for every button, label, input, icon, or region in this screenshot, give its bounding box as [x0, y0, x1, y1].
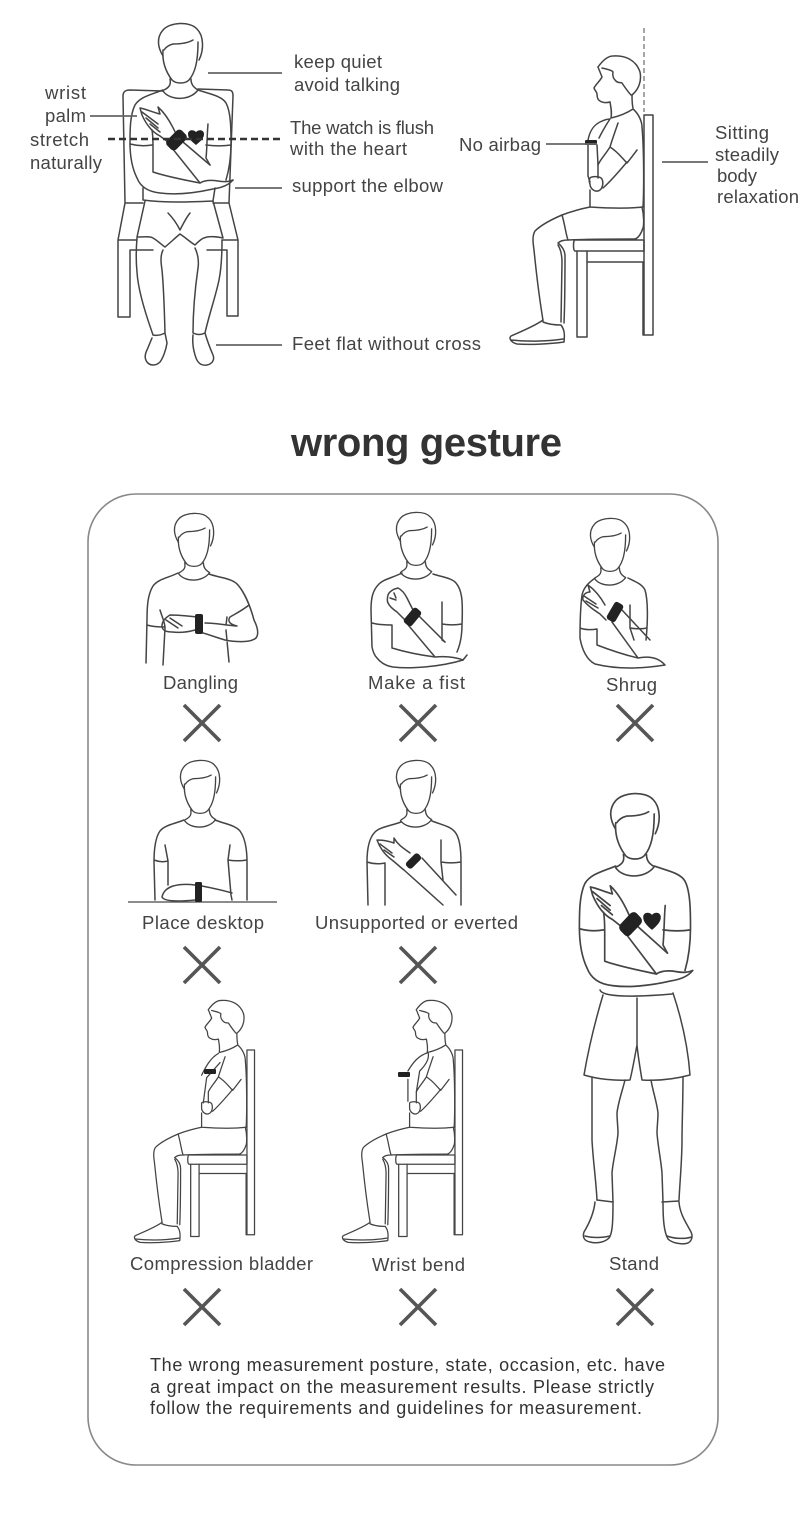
head: [158, 23, 203, 98]
label: stretch naturally: stretch: [30, 129, 89, 150]
leader line: keep quiet: [208, 72, 282, 74]
cross mark: [184, 1289, 220, 1325]
text block: warning note: a great impact on the measurement results. Please strictly: [150, 1377, 654, 1397]
text block: warning note: follow the requirements and guidelines for measurement.: [150, 1398, 642, 1418]
label: place desktop: Place desktop: [142, 912, 264, 933]
figure: unsupported or everted: [367, 760, 461, 905]
label: keep quiet, avoid talking: keep quiet: [294, 51, 382, 72]
seated posture front view: [118, 23, 238, 365]
figure: shrug: [580, 518, 665, 668]
arm and watch: [585, 119, 637, 191]
cross mark: [400, 947, 436, 983]
seated posture side view: [510, 28, 653, 344]
label: sitting steadily body relaxation: Sitting: [715, 122, 769, 143]
label: sitting steadily body relaxation: steadily: [715, 144, 780, 165]
leader line: palm: [90, 115, 137, 117]
vertical reference dashed line: [643, 28, 645, 112]
label: dangling: Dangling: [163, 672, 238, 693]
label: compression bladder: Compression bladder: [130, 1253, 313, 1274]
label: sitting steadily body relaxation: body: [717, 165, 758, 186]
shorts: [584, 990, 690, 1080]
label: make a fist: Make a fist: [368, 672, 465, 693]
label: no airbag: No airbag: [459, 134, 541, 155]
shoes: [583, 1200, 692, 1244]
label: wrist palm: [44, 82, 86, 126]
figure: place desktop: [128, 760, 277, 902]
label: the watch is flush with the heart: with the heart: [289, 138, 407, 159]
cross mark: [400, 705, 436, 741]
cross mark: [617, 1289, 653, 1325]
label: the watch is flush with the heart: [289, 117, 434, 159]
heart level dashed line: [108, 138, 282, 140]
shorts: [137, 188, 223, 247]
label: wrist palm: palm: [45, 105, 86, 126]
chair front view: [118, 89, 238, 317]
label: shrug: Shrug: [606, 674, 657, 695]
arms and torso with watch and heart: [130, 90, 233, 194]
label: stand: Stand: [609, 1253, 659, 1274]
label: unsupported or everted: Unsupported or everted: [315, 912, 518, 933]
label: wrist bend: Wrist bend: [372, 1254, 465, 1275]
leader line: sitting: [662, 161, 708, 163]
text block: warning note: [150, 1355, 665, 1418]
leader line: feet: [216, 344, 282, 346]
figure: compression bladder: [134, 1000, 255, 1243]
label: feet flat: Feet flat without cross: [292, 333, 481, 354]
cross mark: [184, 947, 220, 983]
body side view: [510, 56, 644, 344]
label: keep quiet, avoid talking: avoid talking: [294, 74, 400, 95]
chair side view: [574, 115, 653, 337]
legs and shoes: [136, 238, 222, 365]
figure: make a fist: [371, 512, 467, 668]
figure: stand: [579, 794, 693, 1244]
label: the watch is flush with the heart: The watch is flush: [290, 117, 434, 138]
label: sitting steadily body relaxation: relaxation: [717, 186, 799, 207]
leader line: support the elbow: [235, 187, 282, 189]
label: support the elbow: support the elbow: [292, 175, 444, 196]
figure: wrist bend: [342, 1000, 463, 1243]
label: sitting steadily body relaxation: [715, 122, 799, 207]
cross mark: [400, 1289, 436, 1325]
cross mark: [617, 705, 653, 741]
label: stretch naturally: naturally: [30, 152, 103, 173]
legs: [592, 1077, 683, 1202]
label: keep quiet, avoid talking: [294, 51, 400, 95]
text block: warning note: The wrong measurement posture, state, occasion, etc. have: [150, 1355, 665, 1375]
label: stretch naturally: [30, 129, 103, 173]
panel: wrong gestures: [88, 494, 718, 1465]
figure: dangling: [146, 513, 258, 665]
cross mark: [184, 705, 220, 741]
label: wrist palm: wrist: [44, 82, 86, 103]
leader line: no airbag: [546, 143, 597, 145]
title: wrong gesture: [290, 421, 562, 465]
